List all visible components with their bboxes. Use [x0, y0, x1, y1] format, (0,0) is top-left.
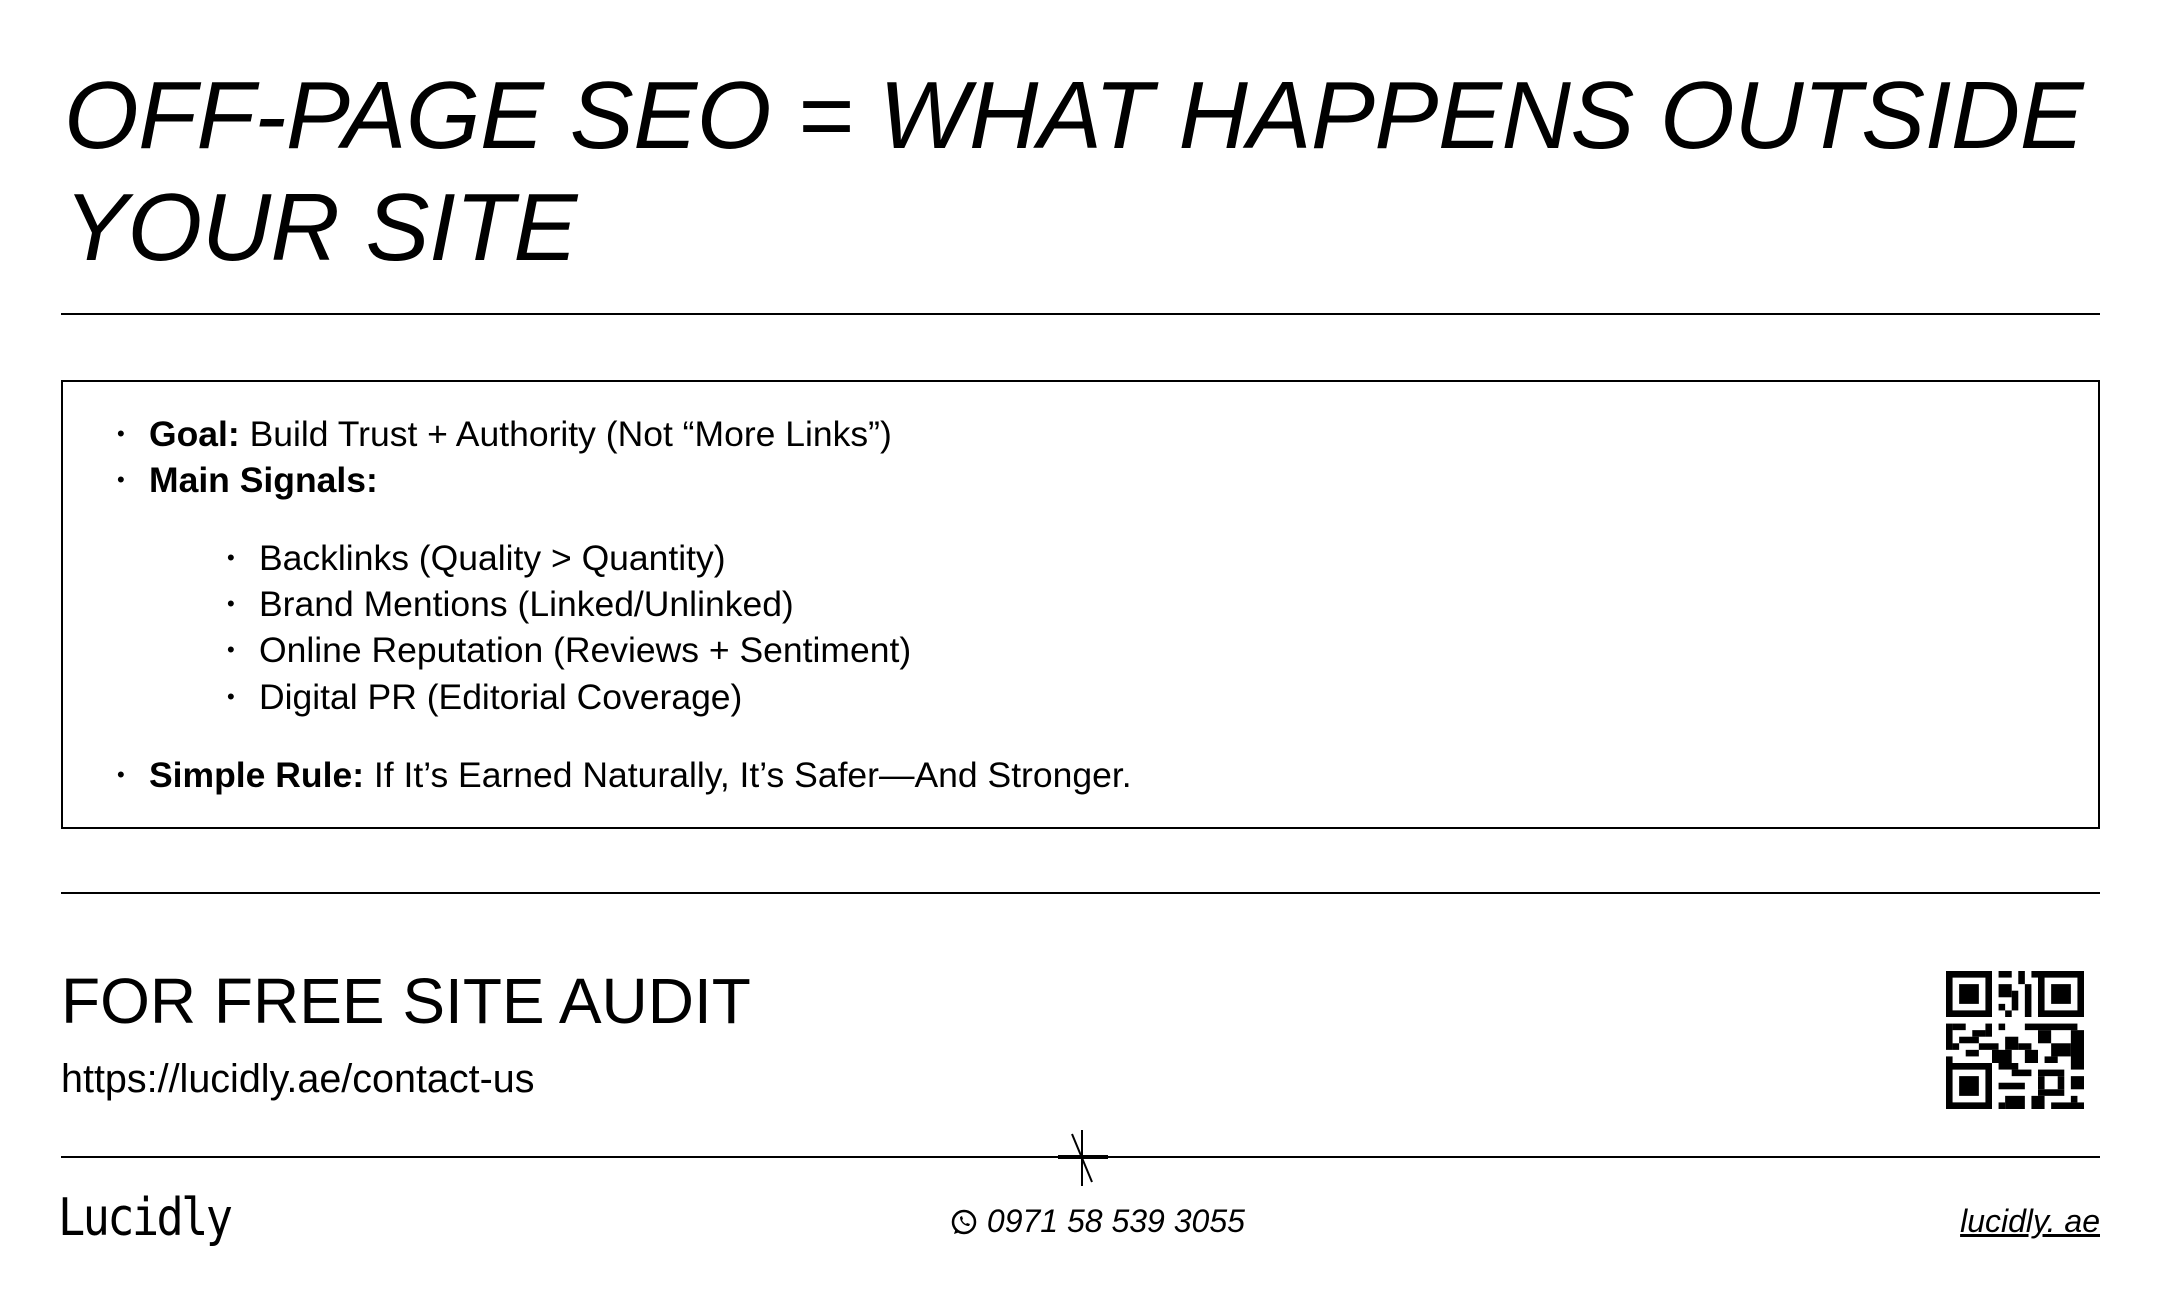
icon: star mark: [1058, 1130, 1108, 1186]
panel: key points box: [61, 380, 2100, 829]
icon: QR code: [1946, 971, 2084, 1109]
link: website: lucidly. ae: [1960, 1203, 2100, 1239]
sub-bullet: brand mentions: Brand Mentions (Linked/Unlinked): [259, 584, 794, 624]
title: [64, 62, 2085, 281]
sub-bullet: backlinks: Backlinks (Quality > Quantity): [259, 538, 726, 578]
contact: whatsapp phone: 0971 58 539 3055: [987, 1203, 1245, 1239]
CTA url: https://lucidly.ae/contact-us: [61, 1057, 534, 1101]
bullet: main signals: Main Signals:: [149, 460, 378, 500]
sub-bullet: reputation: Online Reputation (Reviews + Sentiment): [259, 630, 911, 670]
CTA heading: FOR FREE SITE AUDIT: [61, 965, 751, 1037]
bullet: simple rule: Simple Rule: If It’s Earned Naturally, It’s Safer—And Stronger.: [149, 755, 1132, 795]
icon: whatsapp: [952, 1210, 976, 1234]
logo: Lucidly: [58, 1188, 230, 1248]
sub-bullet: digital PR: Digital PR (Editorial Coverage): [259, 677, 742, 717]
title: YOUR SITE: [64, 174, 577, 281]
title: OFF-PAGE SEO = WHAT HAPPENS OUTSIDE: [64, 62, 2083, 169]
bullet: goal: Goal: Build Trust + Authority (Not “More Links”): [149, 414, 892, 454]
